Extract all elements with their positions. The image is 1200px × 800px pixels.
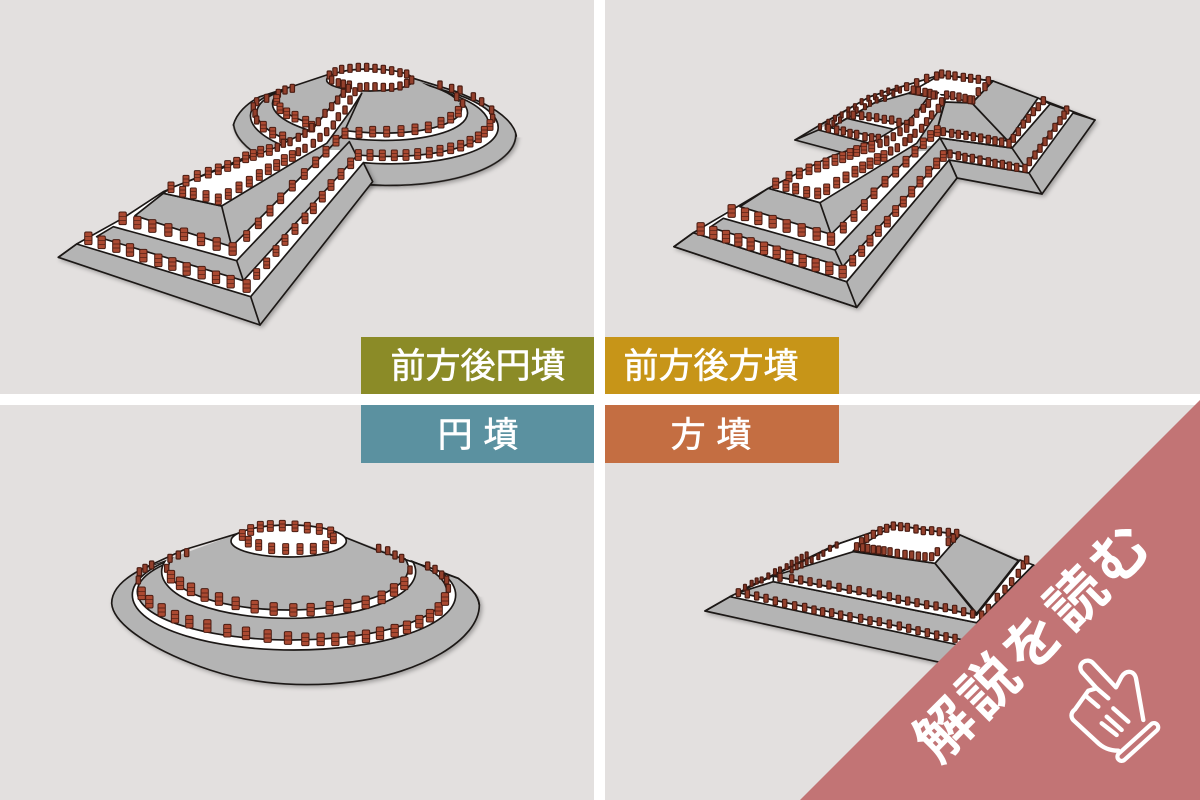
illustration: double-square mound (zenpo-koho-fun)	[674, 74, 1095, 307]
label: hofun	[605, 405, 839, 463]
label: zenpo-koho-fun: 前方後方墳	[623, 347, 799, 386]
silhouette and rear terraces	[674, 75, 1095, 307]
haniwa rows	[701, 74, 1067, 272]
haniwa rows	[138, 526, 448, 639]
label: hofun: 方 墳	[671, 416, 751, 455]
label: enpun	[361, 405, 594, 463]
front terraces	[674, 93, 957, 307]
banner triangle	[800, 400, 1200, 800]
icon: pointing hand	[1071, 661, 1154, 757]
label: zenpo-koho-fun	[605, 337, 839, 394]
round rear mound	[220, 50, 547, 192]
label: enpun: 円 墳	[438, 416, 518, 455]
haniwa rows	[738, 526, 1027, 638]
haniwa rows	[88, 67, 493, 286]
illustration: keyhole-shaped mound (zenpo-koen-fun)	[58, 50, 547, 325]
illustration: round mound (enpun)	[100, 500, 500, 685]
square front mound	[58, 85, 373, 325]
mound tiers	[705, 525, 1083, 673]
label: zenpo-koen-fun: 前方後円墳	[390, 347, 566, 386]
label: zenpo-koen-fun	[361, 337, 594, 394]
illustration: square mound (hofun)	[705, 525, 1083, 673]
corner banner: read commentary	[800, 400, 1200, 800]
mound tiers	[100, 500, 500, 685]
banner text: 解説を読む	[902, 509, 1167, 774]
